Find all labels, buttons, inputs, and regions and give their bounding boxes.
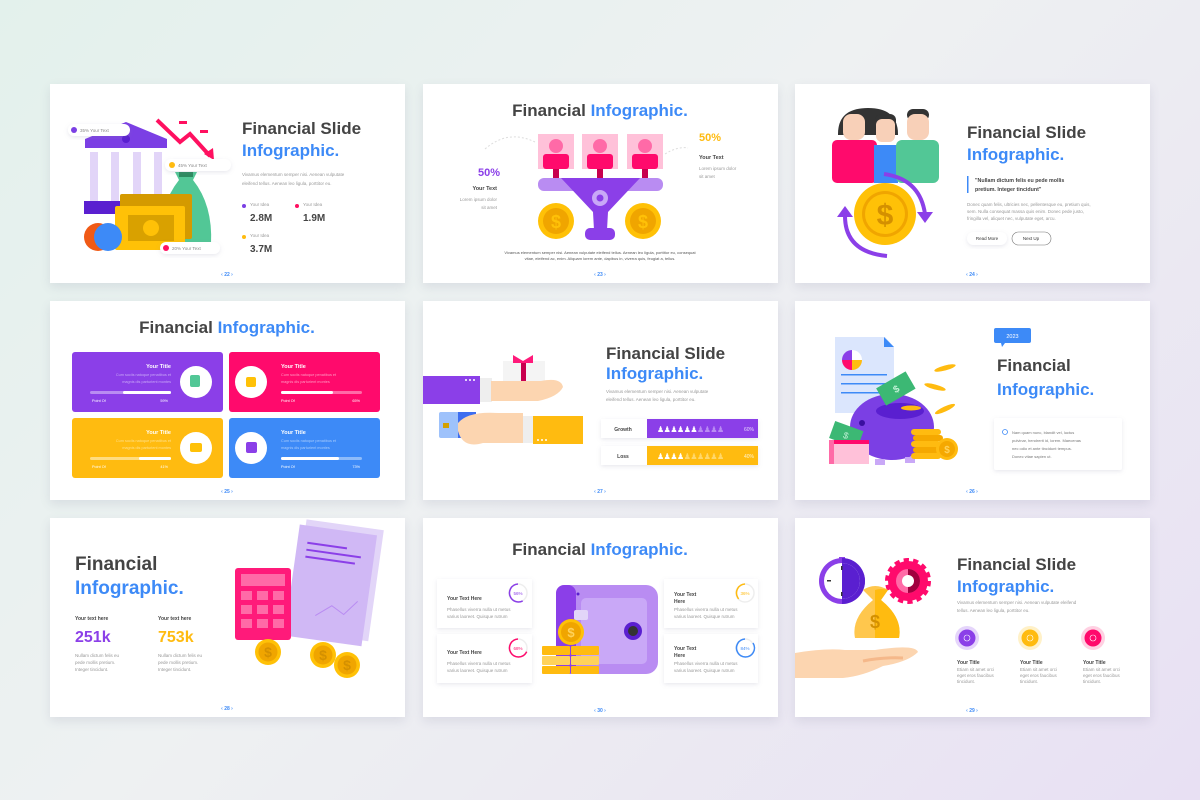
buttons (967, 232, 1051, 245)
card 68%: varius laoreet. Quisque rutrum (447, 668, 508, 673)
item 2: Etiam sit amet orci (1020, 667, 1057, 672)
card purple: 59% (160, 399, 169, 403)
item 1 (955, 626, 995, 684)
body text (606, 389, 709, 402)
card blue (229, 418, 380, 478)
slide 28: calculator (50, 518, 405, 717)
hands illustration (423, 355, 583, 444)
calculator and documents illustration: $ (319, 647, 327, 663)
body text (242, 172, 345, 186)
heading: Infographic. (997, 380, 1094, 399)
item 1: eget eros faucibus (957, 673, 995, 678)
card 84%: Here (674, 653, 685, 659)
card 84%: Your Text (674, 646, 697, 652)
year badge: 2023 (1006, 334, 1019, 340)
card 56%: Phasellus viverra nulla ut metus (447, 607, 511, 612)
bottom text (504, 250, 696, 261)
page number: ‹ 22 › (221, 272, 233, 278)
card 36%: Your Text (674, 592, 697, 598)
heading: Infographic. (606, 364, 703, 383)
quote (967, 176, 1064, 193)
card blue: Cum sociis natoque penatibus et (281, 439, 337, 443)
stats: 3.7M (250, 244, 272, 255)
loss bar: 40% (744, 454, 755, 460)
item 2: Your Title (1020, 660, 1043, 666)
item 1: Etiam sit amet orci (957, 667, 994, 672)
growth bar: 60% (744, 427, 755, 433)
item 3: Etiam sit amet orci (1083, 667, 1120, 672)
bottom text: vitae, eleifend ac, enim. Aliquam lorem ante, dapibus in, viverra quis, feugiat a, tellus. (525, 256, 675, 261)
callout pills: 20% Your Text (172, 246, 201, 251)
growth bar: Growth (614, 427, 632, 433)
slide 29: hand with money bag (795, 518, 1150, 717)
card 36%: Here (674, 599, 685, 605)
card yellow: Your Title (146, 430, 171, 436)
buttons: Read More (976, 236, 999, 241)
calculator and documents illustration: $ (343, 657, 351, 673)
stat 1: Your text here (75, 616, 108, 622)
page number: ‹ 24 › (966, 272, 978, 278)
item 2 (1018, 626, 1058, 684)
left stat: Your Text (472, 186, 497, 192)
card purple: magnis dis parturient montes (122, 380, 171, 384)
heading: Infographic. (242, 141, 339, 160)
callout pills: 35% Your Text (80, 128, 109, 133)
body text: eleifend tellus. Aenean leo ligula, porttitor eu. (606, 397, 696, 402)
year badge (994, 328, 1031, 347)
heading: Financial Slide (242, 119, 361, 138)
card 68% (437, 634, 532, 683)
stat 2: 753k (158, 629, 194, 646)
card pink: Cum sociis natoque penatibus et (281, 373, 337, 377)
stats: 1.9M (303, 213, 325, 224)
slide 30: safe (423, 518, 778, 717)
calculator and documents illustration: $ (264, 644, 272, 660)
body text: tellus. Aenean leo ligula, porttitor eu. (957, 608, 1030, 613)
card 56%: Your Text Here (447, 596, 482, 602)
stats: Your Idea (250, 202, 270, 207)
item 2: tincidunt. (1020, 679, 1038, 684)
people illustration (832, 108, 939, 256)
card 56% (437, 579, 532, 628)
stat 1: Integer tincidunt. (75, 667, 108, 672)
page number: ‹ 26 › (966, 489, 978, 495)
piggy illustration: $ (842, 430, 850, 441)
heading: Financial Slide (957, 555, 1076, 574)
slide 22: bank illustration (50, 84, 405, 283)
left stat: 50% (478, 167, 500, 179)
left stat (460, 167, 500, 210)
body text (967, 202, 1091, 221)
left stat: sit amet (481, 205, 498, 210)
card 36% (664, 579, 758, 628)
heading (957, 555, 1076, 596)
growth bar (601, 419, 758, 438)
card purple (72, 352, 223, 412)
slide 25: four cards (50, 301, 405, 500)
card 68%: Your Text Here (447, 650, 482, 656)
card blue: Point Of (281, 465, 296, 469)
stat 2 (158, 616, 203, 672)
stat 1 (75, 616, 120, 672)
right stat: Your Text (699, 155, 724, 161)
card pink: magnis dis parturient montes (281, 380, 330, 384)
page number: ‹ 25 › (221, 489, 233, 495)
callout pills: 45% Your Text (178, 163, 207, 168)
body text: Vivamus elementum semper nisi. Aenean vulputate (606, 389, 709, 394)
stat 2: pede mollis pretium. (158, 660, 198, 665)
card 36%: Phasellus viverra nulla ut metus (674, 607, 738, 612)
bottom text: Vivamus elementum semper nisi. Aenean vulputate eleifend tellus. Aenean leo ligula, porttitor eu, consequat (504, 250, 696, 255)
card blue: Your Title (281, 430, 306, 436)
card yellow: 41% (160, 465, 169, 469)
card 84%: Phasellus viverra nulla ut metus (674, 661, 738, 666)
info box: Donec vitae sapien ut. (1012, 454, 1052, 459)
piggy illustration: $ (891, 383, 902, 396)
slide 27: hands exchange (423, 301, 778, 500)
heading (997, 356, 1094, 399)
loss bar: ♟♟♟♟♟♟♟♟♟♟ (657, 452, 724, 461)
left stat: Lorem ipsum dolor (460, 197, 498, 202)
stats: Your Idea (303, 202, 323, 207)
page number: ‹ 27 › (594, 489, 606, 495)
stats: Your Idea (250, 233, 270, 238)
piggy illustration (829, 337, 958, 465)
heading: Financial Slide (967, 123, 1086, 142)
card blue: magnis dis parturient montes (281, 446, 330, 450)
card purple: Point Of (92, 399, 107, 403)
card 84% (664, 634, 758, 683)
heading: Infographic. (75, 578, 184, 599)
body text: Vivamus elementum semper nisi. Aenean vulputate (242, 172, 345, 177)
buttons: Next Up (1023, 236, 1040, 241)
page number: ‹ 30 › (594, 708, 606, 714)
card 56%: 56% (513, 591, 523, 596)
calculator and documents illustration (235, 519, 384, 678)
illustration: bank, bag, cash (84, 120, 214, 251)
growth bar: ♟♟♟♟♟♟♟♟♟♟ (657, 425, 724, 434)
card 84%: varius laoreet. Quisque rutrum (674, 668, 735, 673)
right stat: Lorem ipsum dolor (699, 166, 737, 171)
info box (994, 418, 1122, 470)
body text: fringilla vel, aliquet nec, vulputate eget, arcu. (967, 216, 1056, 221)
funnel illustration: $ (638, 212, 648, 232)
item 3: eget eros faucibus (1083, 673, 1121, 678)
heading (75, 554, 184, 599)
body text: eleifend tellus. Aenean leo ligula, porttitor eu. (242, 181, 332, 186)
stats (242, 202, 325, 255)
quote: pretium. Integer tincidunt" (975, 187, 1042, 193)
page number: ‹ 28 › (221, 706, 233, 712)
item 2: eget eros faucibus (1020, 673, 1058, 678)
item 3: Your Title (1083, 660, 1106, 666)
right stat: 50% (699, 132, 721, 144)
card yellow (72, 418, 223, 478)
heading: Financial Slide (606, 344, 725, 363)
heading (606, 344, 725, 383)
card yellow: Point Of (92, 465, 107, 469)
item 3 (1081, 626, 1121, 684)
info box: nec odio et ante tincidunt tempus. (1012, 446, 1072, 451)
money illustration: $ (870, 612, 880, 632)
safe illustration (542, 585, 658, 674)
slide 24: people and coin (795, 84, 1150, 283)
body text: Donec quam felis, ultricies nec, pellentesque eu, pretium quis, (967, 202, 1091, 207)
loss bar (601, 446, 758, 465)
stat 1: pede mollis pretium. (75, 660, 115, 665)
slide 26: piggy bank (795, 301, 1150, 500)
card pink: Your Title (281, 364, 306, 370)
piggy illustration: $ (944, 445, 950, 456)
card 36%: varius laoreet. Quisque rutrum (674, 614, 735, 619)
card purple: Cum sociis natoque penatibus et (116, 373, 172, 377)
card pink: 65% (352, 399, 361, 403)
card 56%: varius laoreet. Quisque rutrum (447, 614, 508, 619)
stat 2: Your text here (158, 616, 191, 622)
card 68%: 68% (513, 646, 523, 651)
money illustration (795, 557, 928, 678)
heading: Financial (75, 554, 157, 575)
heading: Financial (997, 356, 1071, 375)
card yellow: magnis dis parturient montes (122, 446, 171, 450)
body text: sem. Nulla consequat massa quis enim. Donec pede justo, (967, 209, 1084, 214)
page number: ‹ 23 › (594, 272, 606, 278)
info box: pulvinar, hendrerit id, lorem. Maecenas (1012, 438, 1081, 443)
heading: Financial Infographic. (512, 101, 688, 120)
right stat (699, 132, 737, 179)
card purple: Your Title (146, 364, 171, 370)
stat 1: Nullam dictum felis eu (75, 653, 120, 658)
heading: Financial Infographic. (512, 540, 688, 559)
page number: ‹ 29 › (966, 708, 978, 714)
stat 2: Integer tincidunt. (158, 667, 191, 672)
card 84%: 84% (740, 646, 750, 651)
stat 1: 251k (75, 629, 111, 646)
card 36%: 36% (740, 591, 750, 596)
funnel illustration (485, 134, 688, 240)
heading (967, 123, 1086, 164)
funnel illustration: $ (551, 212, 561, 232)
item 1: tincidunt. (957, 679, 975, 684)
body text: Vivamus elementum semper nisi. Aenean vulputate eleifend (957, 600, 1077, 605)
card 68%: Phasellus viverra nulla ut metus (447, 661, 511, 666)
heading: Infographic. (967, 145, 1064, 164)
quote: "Nullam dictum felis eu pede mollis (975, 178, 1064, 184)
heading (242, 119, 361, 160)
heading: Financial Infographic. (139, 318, 315, 337)
stat 2: Nullam dictum felis eu (158, 653, 203, 658)
info box: Nam quam nunc, blandit vel, luctus (1012, 430, 1074, 435)
card blue: 73% (352, 465, 361, 469)
safe illustration: $ (567, 625, 575, 640)
card pink (229, 352, 380, 412)
callout pills (68, 124, 231, 254)
loss bar: Loss (617, 454, 629, 460)
slide 23: funnel (423, 84, 778, 283)
stats: 2.8M (250, 213, 272, 224)
body text (957, 600, 1077, 613)
people illustration: $ (877, 199, 894, 232)
card yellow: Cum sociis natoque penatibus et (116, 439, 172, 443)
card pink: Point Of (281, 399, 296, 403)
item 1: Your Title (957, 660, 980, 666)
heading: Infographic. (957, 577, 1054, 596)
item 3: tincidunt. (1083, 679, 1101, 684)
right stat: sit amet (699, 174, 716, 179)
